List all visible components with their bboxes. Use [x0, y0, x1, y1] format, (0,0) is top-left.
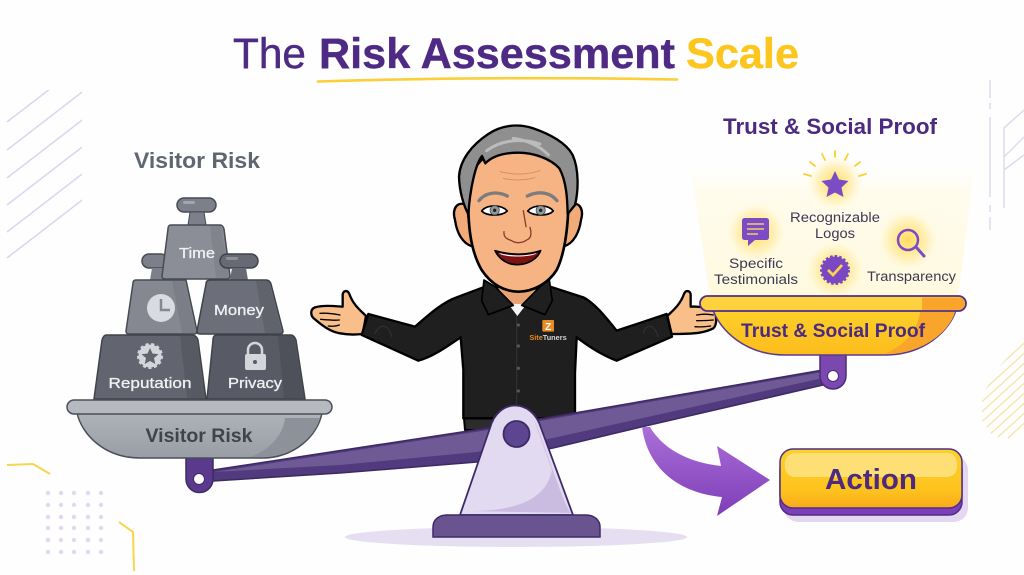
left hand: [311, 291, 366, 335]
forehead wrinkles: [500, 171, 540, 180]
person: cartoon presenter: [311, 126, 716, 430]
label: Transparency: Transparency: [867, 269, 956, 284]
bowl shading: [885, 312, 955, 354]
weight: Privacy: Privacy: [228, 375, 283, 392]
hair highlight: [487, 138, 548, 155]
label: Recognizable Logos: [790, 210, 880, 241]
undershirt: [508, 304, 527, 316]
icon: magnifier: [878, 210, 938, 270]
fulcrum base: [433, 515, 600, 537]
title: Risk Assessment: [319, 30, 675, 78]
decoration: purple hatching top left: [6, 90, 82, 258]
shirt details and buttons: [375, 313, 658, 410]
heading: Trust & Social Proof: Trust & Social Proof: [723, 114, 938, 139]
title: The: [233, 30, 306, 78]
logo: SiteTuners: Z: [545, 322, 551, 333]
weight: Reputation: Reputation: [108, 375, 192, 392]
pan label: Visitor Risk: [146, 426, 253, 447]
icon: star badge: [138, 344, 162, 368]
pan bowl: [77, 413, 322, 458]
right ear: [563, 204, 582, 247]
ground shadow: [345, 527, 687, 547]
beam: [213, 370, 823, 481]
pan rim: [700, 296, 966, 311]
action button: Action: [825, 464, 917, 496]
weight: Privacy: [207, 335, 305, 399]
left pan: Visitor Risk: [67, 198, 332, 458]
title: Scale: [686, 30, 799, 78]
title underline: [318, 78, 677, 82]
weight: Reputation: [94, 335, 206, 399]
right eye: [528, 206, 553, 215]
logo: SiteTuners: [529, 320, 567, 342]
belt: [463, 410, 500, 430]
eyebrows: [479, 193, 557, 201]
face: [468, 146, 568, 292]
decoration: dashed purple lines top right: [990, 80, 1024, 230]
pan label: Trust & Social Proof: [741, 321, 926, 342]
weight: Time: Time: [179, 245, 215, 262]
right bracket: [820, 353, 846, 389]
label: Specific Testimonials: [714, 256, 798, 287]
action button: [780, 449, 968, 522]
fulcrum stand: [460, 406, 573, 515]
arrow: [642, 427, 770, 516]
decoration: dot grid: [46, 491, 103, 554]
left ear: [454, 204, 473, 247]
decoration: yellow hatching bottom right: [982, 342, 1024, 438]
label: Specific Testimonials: Testimonials: [714, 272, 798, 287]
decoration: gold corner line: [7, 464, 50, 474]
label: Recognizable Logos: Logos: [815, 226, 855, 241]
shirt: [362, 287, 672, 418]
weight: Money: [197, 254, 283, 334]
left bracket: [186, 458, 213, 493]
bowl shading: [250, 418, 320, 457]
icon: speech bubble: [726, 202, 786, 262]
title: [233, 30, 799, 82]
decoration: gold bracket line: [119, 522, 134, 571]
weight: Time: [162, 198, 230, 279]
rim shading: [922, 298, 965, 310]
collar: [482, 280, 552, 315]
icon: check badge: [806, 241, 864, 299]
icon: padlock: [245, 343, 266, 370]
mouth: [495, 251, 541, 265]
pan bowl: [713, 310, 956, 355]
light beam: [690, 165, 975, 296]
heading: Visitor Risk: Visitor Risk: [134, 148, 261, 173]
pan rim: [67, 400, 332, 414]
icon: clock: [147, 294, 175, 322]
label: Specific Testimonials: Specific: [729, 256, 783, 271]
weight: clock: [126, 254, 197, 334]
weight: Money: Money: [214, 302, 265, 319]
right pan: Trust & Social Proof: [690, 151, 975, 355]
right hand: [667, 291, 716, 334]
label: Recognizable Logos: Recognizable: [790, 210, 880, 225]
neck: [492, 277, 543, 305]
icon: star with rays: [804, 151, 866, 211]
hair: [459, 126, 578, 214]
left eye: [482, 206, 507, 215]
logo: SiteTuners: SiteTuners: [529, 335, 567, 342]
fulcrum pivot: [504, 421, 530, 447]
fulcrum: [433, 406, 600, 537]
nose: [504, 211, 531, 243]
